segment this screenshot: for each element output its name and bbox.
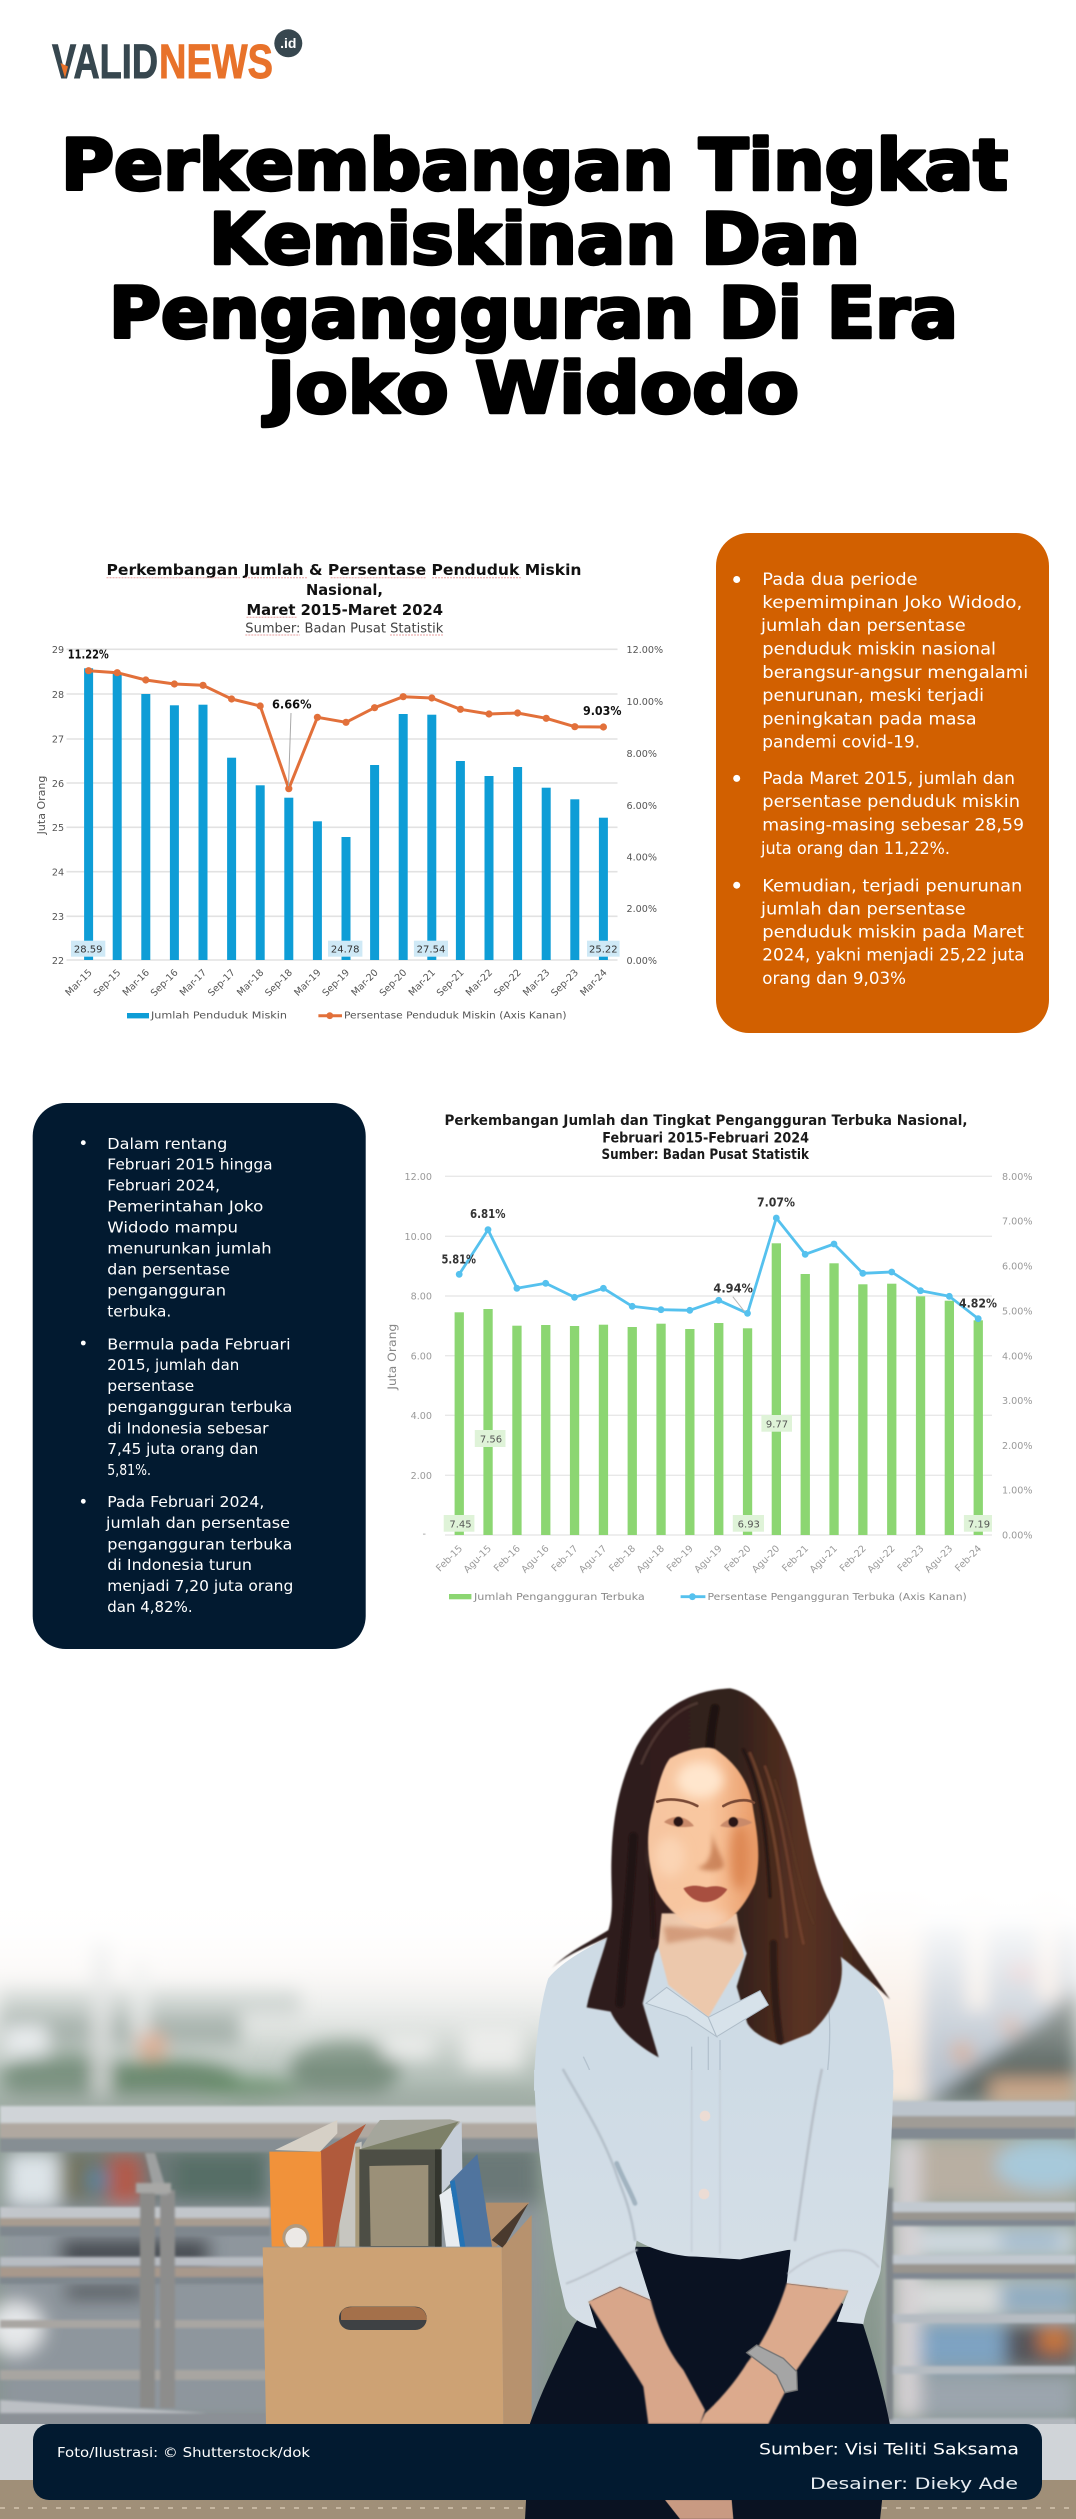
left axis labels: 23 bbox=[52, 912, 64, 923]
value tags bbox=[444, 1415, 992, 1532]
x axis labels: Mar-19 bbox=[292, 967, 324, 999]
x axis labels: Mar-16 bbox=[121, 967, 152, 999]
percentage callouts: 6.81% bbox=[470, 1206, 506, 1221]
right axis labels: 2.00% bbox=[1002, 1441, 1032, 1452]
percentage callouts bbox=[442, 1195, 997, 1310]
legend: Persentase Pengangguran Terbuka (Axis Kanan) bbox=[708, 1592, 967, 1603]
right axis labels: 7.00% bbox=[1002, 1217, 1032, 1228]
left axis labels: 25 bbox=[52, 823, 64, 834]
percentage callouts: 11.22% bbox=[68, 647, 109, 662]
bullet text block bbox=[733, 570, 1028, 989]
right axis labels: 8.00% bbox=[1002, 1172, 1032, 1183]
source and designer: Sumber: Visi Teliti Saksama bbox=[759, 2440, 1019, 2458]
right axis labels: 0.00% bbox=[1002, 1531, 1032, 1542]
value tags: 7.19 bbox=[968, 1519, 990, 1530]
x axis labels: Agu-16 bbox=[520, 1543, 552, 1575]
value tags: 24.78 bbox=[331, 944, 360, 956]
eyebrows bbox=[657, 1800, 697, 1806]
percentage callouts bbox=[68, 647, 622, 718]
x axis labels: Feb-18 bbox=[607, 1543, 638, 1574]
bullet text block: Widodo mampu bbox=[107, 1218, 238, 1236]
x axis labels: Feb-22 bbox=[838, 1543, 869, 1574]
percentage callouts: 4.94% bbox=[713, 1280, 753, 1295]
photo: woman, lower body bbox=[525, 2070, 893, 2519]
x axis labels: Mar-24 bbox=[578, 967, 610, 999]
left axis labels: 24 bbox=[52, 868, 64, 878]
bullet text block: Februari 2015 hingga bbox=[107, 1156, 273, 1174]
bullet text block: menurunkan jumlah bbox=[107, 1240, 272, 1258]
right axis labels bbox=[1002, 1172, 1032, 1542]
poverty chart title bbox=[106, 561, 582, 636]
legend: Persentase Penduduk Miskin (Axis Kanan) bbox=[344, 1011, 567, 1022]
value tags: 27.54 bbox=[417, 944, 445, 956]
unemployment chart title: Sumber: Badan Pusat Statistik bbox=[602, 1147, 810, 1163]
y axis label: Juta Orang bbox=[35, 776, 48, 835]
bullet text block: penurunan, meski terjadi bbox=[762, 686, 984, 706]
paper and blue clipboard bbox=[439, 2187, 462, 2247]
bullet text block: 7,45 juta orang dan bbox=[107, 1440, 258, 1458]
value tags: 28.59 bbox=[74, 944, 103, 956]
binder tops bbox=[360, 2119, 460, 2150]
title bbox=[61, 124, 1008, 429]
bullet text block: 5,81%. bbox=[107, 1461, 151, 1479]
percentage callouts: 5.81% bbox=[442, 1251, 476, 1266]
x axis labels bbox=[63, 967, 610, 999]
source and designer bbox=[759, 2440, 1019, 2493]
unemployment chart title: Perkembangan Jumlah dan Tingkat Pengangguran Terbuka Nasional, bbox=[444, 1113, 968, 1129]
x axis labels: Mar-17 bbox=[178, 967, 209, 999]
bullet text block: pandemi covid-19. bbox=[762, 733, 920, 753]
logo: Validnews.id: .id bbox=[280, 35, 296, 51]
panel: orange poverty summary bbox=[716, 533, 1049, 1033]
left axis labels: 8.00 bbox=[411, 1292, 432, 1303]
photo: cardboard box with binders bbox=[263, 2119, 532, 2424]
orange binder bbox=[275, 2120, 337, 2152]
right axis labels: 8.00% bbox=[626, 749, 657, 760]
bullet text block: persentase penduduk miskin bbox=[762, 792, 1020, 812]
x axis labels: Feb-21 bbox=[780, 1543, 811, 1574]
left axis labels: 10.00 bbox=[405, 1232, 432, 1243]
line: persentase pengangguran terbuka bbox=[456, 1215, 982, 1322]
face bbox=[648, 1748, 758, 1929]
bullet text block: Bermula pada Februari bbox=[107, 1335, 291, 1353]
legend bbox=[127, 1011, 567, 1022]
eyes bbox=[664, 1817, 752, 1828]
y axis label: Juta Orang bbox=[385, 1324, 399, 1391]
legend bbox=[449, 1592, 967, 1603]
x axis labels: Sep-19 bbox=[320, 967, 352, 999]
logo: Validnews.id bbox=[52, 29, 302, 89]
x axis labels: Agu-15 bbox=[462, 1543, 494, 1575]
bullet text block: dan persentase bbox=[107, 1260, 230, 1278]
legend: Jumlah Pengangguran Terbuka bbox=[473, 1592, 645, 1603]
hands below footer bbox=[665, 2500, 733, 2519]
shirt shoulders bbox=[534, 1933, 893, 2091]
value tags: 6.93 bbox=[738, 1519, 760, 1530]
poverty chart title: Nasional, bbox=[306, 581, 383, 599]
x axis labels: Mar-23 bbox=[521, 967, 552, 999]
below top rail left bbox=[0, 2145, 540, 2205]
left axis labels: 22 bbox=[52, 956, 64, 967]
bullet text block: di Indonesia turun bbox=[107, 1556, 252, 1574]
panel: poverty chart bbox=[35, 561, 663, 1022]
photo: granite ledge bbox=[0, 2480, 1076, 2519]
bars: jumlah pengangguran terbuka bbox=[455, 1243, 983, 1535]
bullet text block: Pemerintahan Joko bbox=[107, 1198, 263, 1216]
x axis labels: Agu-23 bbox=[923, 1543, 955, 1575]
box right side bbox=[502, 2215, 532, 2424]
bullet text block: Pada Februari 2024, bbox=[107, 1493, 264, 1511]
x axis labels: Feb-19 bbox=[665, 1543, 696, 1574]
value tags bbox=[71, 941, 620, 957]
left axis labels bbox=[405, 1172, 432, 1540]
shirt bbox=[534, 2070, 893, 2328]
x axis labels: Sep-18 bbox=[263, 967, 295, 999]
x axis labels bbox=[434, 1543, 984, 1575]
bullet text block: 2024, yakni menjadi 25,22 juta bbox=[762, 946, 1025, 966]
title: Pengangguran Di Era bbox=[109, 272, 958, 354]
bullet text block: terbuka. bbox=[107, 1302, 171, 1320]
bullet text block: juta orang dan 11,22%. bbox=[760, 839, 950, 859]
handle hole bbox=[339, 2307, 427, 2330]
box front bbox=[263, 2247, 503, 2424]
bullet text block: menjadi 7,20 juta orang bbox=[107, 1577, 293, 1595]
buttons bbox=[700, 2111, 710, 2121]
x axis labels: Sep-23 bbox=[549, 967, 581, 999]
neck bbox=[658, 1913, 744, 2017]
left axis labels: 6.00 bbox=[411, 1351, 432, 1362]
x axis labels: Sep-21 bbox=[435, 967, 467, 999]
x axis labels: Agu-19 bbox=[693, 1543, 725, 1575]
hair bbox=[552, 1688, 890, 2057]
bullet text block: persentase bbox=[107, 1377, 194, 1395]
bullet text block: berangsur-angsur mengalami bbox=[762, 663, 1028, 683]
right axis labels: 0.00% bbox=[626, 956, 657, 967]
bullet text block: Kemudian, terjadi penurunan bbox=[762, 876, 1022, 896]
bullet text block: peningkatan pada masa bbox=[762, 709, 977, 729]
x axis labels: Sep-16 bbox=[149, 967, 181, 999]
bullet text block: penduduk miskin pada Maret bbox=[762, 923, 1024, 943]
bullet text block: Pada dua periode bbox=[762, 570, 918, 590]
percentage callouts: 7.07% bbox=[757, 1195, 795, 1210]
x axis labels: Agu-18 bbox=[635, 1543, 667, 1575]
inner flap bbox=[486, 2203, 529, 2247]
poverty chart title: Sumber: Badan Pusat Statistik bbox=[245, 621, 444, 636]
bullet text block: jumlah dan persentase bbox=[760, 899, 966, 919]
left axis labels: 28 bbox=[52, 690, 64, 701]
x axis labels: Mar-22 bbox=[464, 967, 495, 999]
bullet text block: kepemimpinan Joko Widodo, bbox=[762, 593, 1022, 613]
x axis labels: Feb-24 bbox=[953, 1543, 984, 1574]
value tags: 25.22 bbox=[589, 944, 618, 956]
hair strands bbox=[620, 1703, 813, 2040]
bullet text block: orang dan 9,03% bbox=[762, 969, 906, 989]
value tags: 7.45 bbox=[449, 1519, 472, 1530]
right axis labels: 3.00% bbox=[1002, 1396, 1032, 1407]
x axis labels: Feb-16 bbox=[492, 1543, 523, 1574]
title: Kemiskinan Dan bbox=[209, 198, 860, 280]
x axis labels: Mar-18 bbox=[235, 967, 266, 999]
left axis labels: 2.00 bbox=[411, 1471, 432, 1482]
percentage callouts: 6.66% bbox=[272, 696, 312, 711]
photo: metal railing bbox=[0, 2101, 1076, 2484]
left axis labels: 4.00 bbox=[411, 1411, 432, 1422]
bullet text block: penduduk miskin nasional bbox=[762, 640, 996, 660]
x axis labels: Sep-17 bbox=[206, 967, 238, 999]
bullet text block: dan 4,82%. bbox=[107, 1598, 193, 1616]
right axis labels: 6.00% bbox=[1002, 1262, 1032, 1273]
right axis labels: 6.00% bbox=[626, 801, 657, 812]
gray binder bbox=[359, 2149, 440, 2247]
sleeve and shirt shading bbox=[563, 2070, 878, 2283]
poverty chart title: Perkembangan Jumlah & Persentase Penduduk Miskin bbox=[106, 561, 582, 579]
unemployment chart title bbox=[444, 1113, 968, 1163]
title: Perkembangan Tingkat bbox=[61, 124, 1008, 206]
percentage callouts: 9.03% bbox=[583, 703, 622, 718]
source and designer: Desainer: Dieky Ade bbox=[810, 2474, 1018, 2493]
x axis labels: Mar-21 bbox=[407, 967, 438, 999]
logo: Validnews.id: VALID bbox=[52, 36, 158, 89]
right side haze bbox=[857, 1900, 923, 2105]
legend: Jumlah Penduduk Miskin bbox=[150, 1011, 287, 1022]
x axis labels: Mar-20 bbox=[349, 967, 381, 999]
right axis labels: 2.00% bbox=[626, 904, 657, 915]
right axis labels: 4.00% bbox=[1002, 1351, 1032, 1362]
left axis labels: 26 bbox=[52, 779, 64, 790]
right axis labels: 4.00% bbox=[626, 852, 657, 864]
bars: jumlah penduduk miskin bbox=[84, 668, 608, 960]
photo: blurred city background bbox=[0, 1800, 1076, 2519]
x axis labels: Mar-15 bbox=[63, 967, 95, 999]
left axis labels: - bbox=[423, 1529, 426, 1540]
photo credit: Foto/Ilustrasi: © Shutterstock/dok bbox=[57, 2446, 311, 2461]
bullet text block: jumlah dan persentase bbox=[760, 616, 966, 636]
right axis labels: 10.00% bbox=[626, 697, 663, 708]
white binder bbox=[335, 2142, 362, 2247]
logo: Validnews.id: NEWS bbox=[159, 36, 273, 89]
x axis labels: Feb-17 bbox=[550, 1543, 580, 1574]
bullet text block: jumlah dan persentase bbox=[105, 1514, 290, 1532]
bullet text block: pengangguran terbuka bbox=[107, 1535, 292, 1553]
bullet text block bbox=[81, 1135, 293, 1616]
bullet text block: Dalam rentang bbox=[107, 1135, 227, 1153]
poverty chart title: Maret 2015-Maret 2024 bbox=[246, 601, 443, 619]
bullet text block: masing-masing sebesar 28,59 bbox=[762, 816, 1024, 836]
left axis labels: 27 bbox=[52, 734, 64, 746]
photo: woman, upper body bbox=[534, 1688, 893, 2091]
left axis labels: 12.00 bbox=[405, 1172, 432, 1183]
bullet text block: pengangguran terbuka bbox=[107, 1398, 292, 1416]
x axis labels: Agu-17 bbox=[577, 1543, 609, 1575]
right axis labels: 12.00% bbox=[626, 645, 663, 656]
x axis labels: Sep-20 bbox=[378, 967, 409, 999]
arms and hands bbox=[588, 2283, 848, 2424]
trousers bbox=[525, 2247, 890, 2519]
x axis labels: Feb-15 bbox=[434, 1543, 465, 1574]
title: Joko Widodo bbox=[263, 347, 799, 429]
lips bbox=[683, 1886, 727, 1902]
footer bar bbox=[33, 2424, 1042, 2500]
top white fade bbox=[0, 1800, 1076, 2070]
bullet text block: di Indonesia sebesar bbox=[107, 1419, 269, 1437]
value tags: 7.56 bbox=[480, 1434, 502, 1445]
watch bbox=[747, 2345, 797, 2393]
x axis labels: Agu-20 bbox=[750, 1543, 782, 1575]
x axis labels: Feb-23 bbox=[896, 1543, 926, 1574]
percentage callouts: 4.82% bbox=[959, 1295, 997, 1310]
x axis labels: Sep-15 bbox=[92, 967, 123, 999]
nose bbox=[697, 1830, 724, 1871]
bullet text block: Februari 2024, bbox=[107, 1177, 220, 1195]
x axis labels: Feb-20 bbox=[723, 1543, 753, 1574]
bullet text block: pengangguran bbox=[107, 1282, 226, 1300]
x axis labels: Agu-21 bbox=[808, 1543, 840, 1575]
panel: navy unemployment summary bbox=[33, 1103, 366, 1649]
right axis labels bbox=[626, 645, 663, 967]
panel: unemployment chart bbox=[385, 1113, 1032, 1603]
right lower bg bbox=[893, 2139, 1076, 2204]
left axis labels: 29 bbox=[52, 645, 64, 656]
unemployment chart title: Februari 2015-Februari 2024 bbox=[602, 1130, 809, 1146]
x axis labels: Agu-22 bbox=[866, 1543, 898, 1575]
face shading bbox=[655, 1762, 750, 1926]
right axis labels: 1.00% bbox=[1002, 1486, 1032, 1497]
bullet text block: 2015, jumlah dan bbox=[107, 1356, 239, 1374]
value tags: 9.77 bbox=[766, 1419, 788, 1430]
line: persentase penduduk miskin bbox=[85, 667, 607, 792]
bullet text block: Pada Maret 2015, jumlah dan bbox=[762, 769, 1015, 789]
right axis labels: 5.00% bbox=[1002, 1306, 1032, 1317]
left axis labels bbox=[52, 645, 64, 967]
x axis labels: Sep-22 bbox=[492, 967, 524, 999]
collar bbox=[646, 1987, 717, 2037]
